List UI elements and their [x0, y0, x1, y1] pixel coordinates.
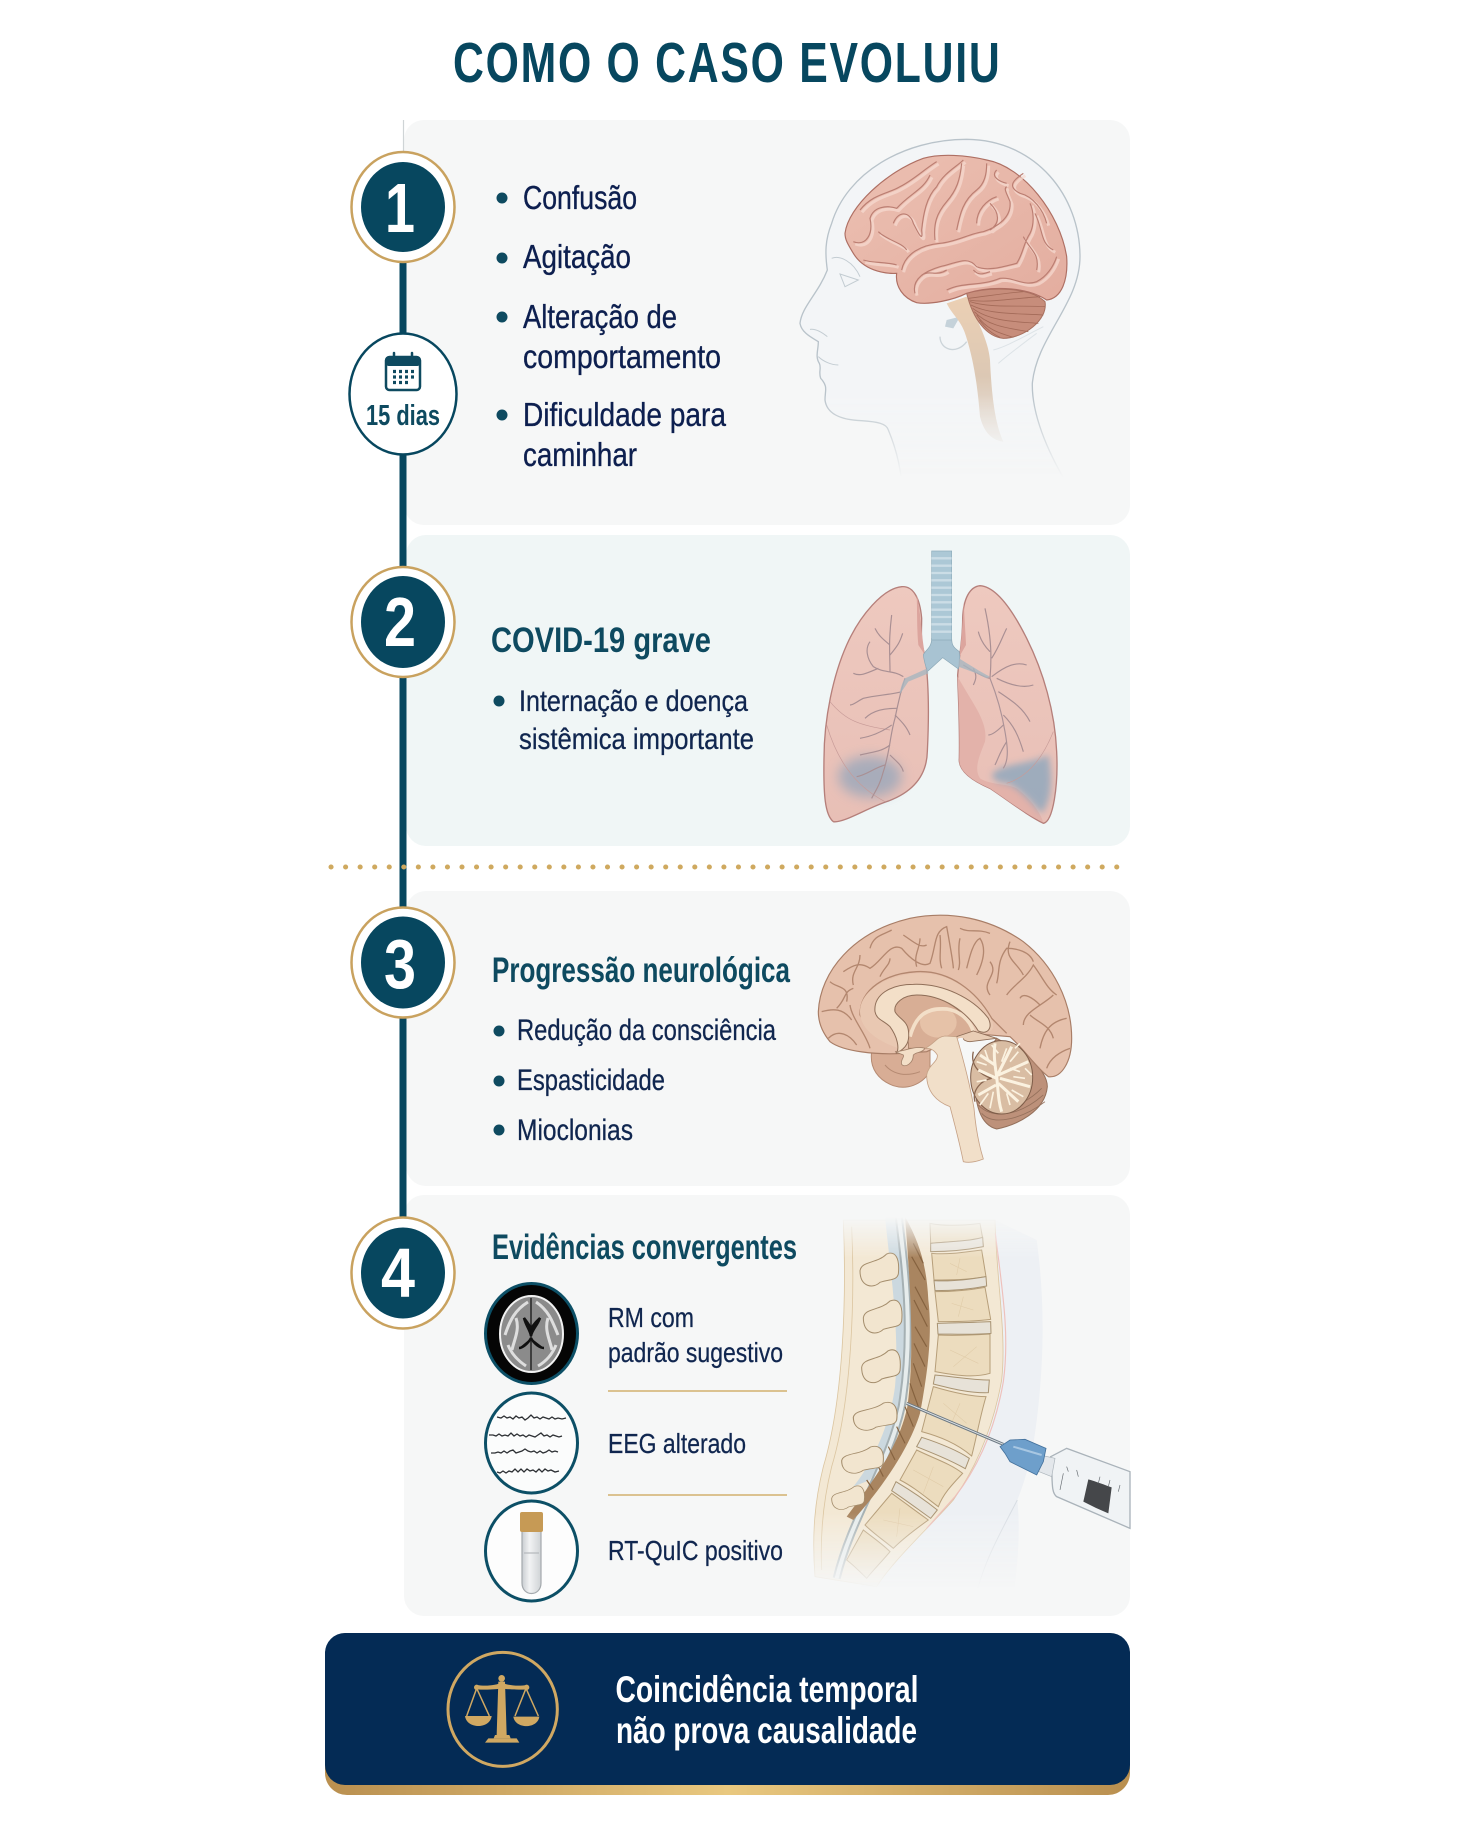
step marker 3: 3 [384, 925, 416, 1003]
list: initial symptoms: Dificuldade para [523, 396, 727, 433]
banner: conclusion [325, 1633, 1130, 1795]
list: initial symptoms: caminhar [523, 436, 637, 473]
text: MRI finding [608, 1302, 783, 1368]
title: COMO O CASO EVOLUIU [453, 30, 1000, 94]
list: initial symptoms: Confusão [523, 179, 637, 216]
panel: step 1 symptoms [404, 120, 1130, 525]
step marker 3 [352, 908, 454, 1018]
list: hospitalization: Internação e doença [519, 685, 748, 718]
list: hospitalization: sistêmica importante [519, 723, 754, 756]
icon: test tube [486, 1501, 578, 1601]
text: MRI finding: padrão sugestivo [608, 1337, 783, 1368]
list: initial symptoms: Agitação [523, 238, 631, 275]
divider: dotted gold line [331, 864, 1128, 870]
list: hospitalization [494, 685, 754, 756]
illustration: lungs [824, 551, 1057, 823]
infographic [325, 42, 1131, 1795]
text: EEG finding: EEG alterado [608, 1428, 746, 1459]
icon: scales of justice [448, 1652, 557, 1766]
duration badge: 15 dias [350, 334, 456, 454]
step marker 1 [352, 152, 454, 262]
text: conclusion statement: não prova causalidade [616, 1710, 917, 1751]
text: MRI finding: RM com [608, 1302, 694, 1333]
panel: step 3 neurological progression [406, 891, 1130, 1186]
illustration: head with brain [800, 139, 1080, 500]
text: RT-QuIC finding: RT-QuIC positivo [608, 1535, 783, 1566]
list: initial symptoms: comportamento [523, 338, 721, 375]
list: neurological signs: Redução da consciência [517, 1014, 776, 1047]
heading: Progressão neurológica: Progressão neurológica [492, 951, 790, 990]
icon: MRI scan [486, 1284, 578, 1384]
list: initial symptoms [496, 179, 727, 473]
timeline line [400, 262, 406, 1222]
step marker 4: 4 [381, 1234, 415, 1312]
text: conclusion statement [616, 1669, 918, 1751]
panel: step 2 covid [406, 535, 1130, 846]
heading: Evidências convergentes: Evidências convergentes [492, 1228, 797, 1267]
heading: COVID-19 grave: COVID-19 grave [491, 621, 711, 660]
list: neurological signs: Espasticidade [517, 1064, 665, 1097]
icon: EEG traces [486, 1393, 578, 1493]
step marker 1: 1 [385, 169, 415, 247]
step marker 4 [352, 1218, 454, 1328]
duration badge: 15 dias: 15 dias [366, 400, 440, 432]
illustration: spine with lumbar puncture [814, 1213, 1130, 1597]
text: conclusion statement: Coincidência temporal [616, 1669, 918, 1710]
step marker 2 [352, 567, 454, 677]
step marker 2: 2 [384, 583, 416, 661]
list: initial symptoms: Alteração de [523, 298, 677, 335]
panel: step 4 converging evidence [404, 1195, 1130, 1616]
illustration: sagittal brain [818, 915, 1072, 1162]
icon: calendar [386, 353, 420, 390]
list: neurological signs [494, 1014, 776, 1147]
list: neurological signs: Mioclonias [517, 1114, 633, 1147]
